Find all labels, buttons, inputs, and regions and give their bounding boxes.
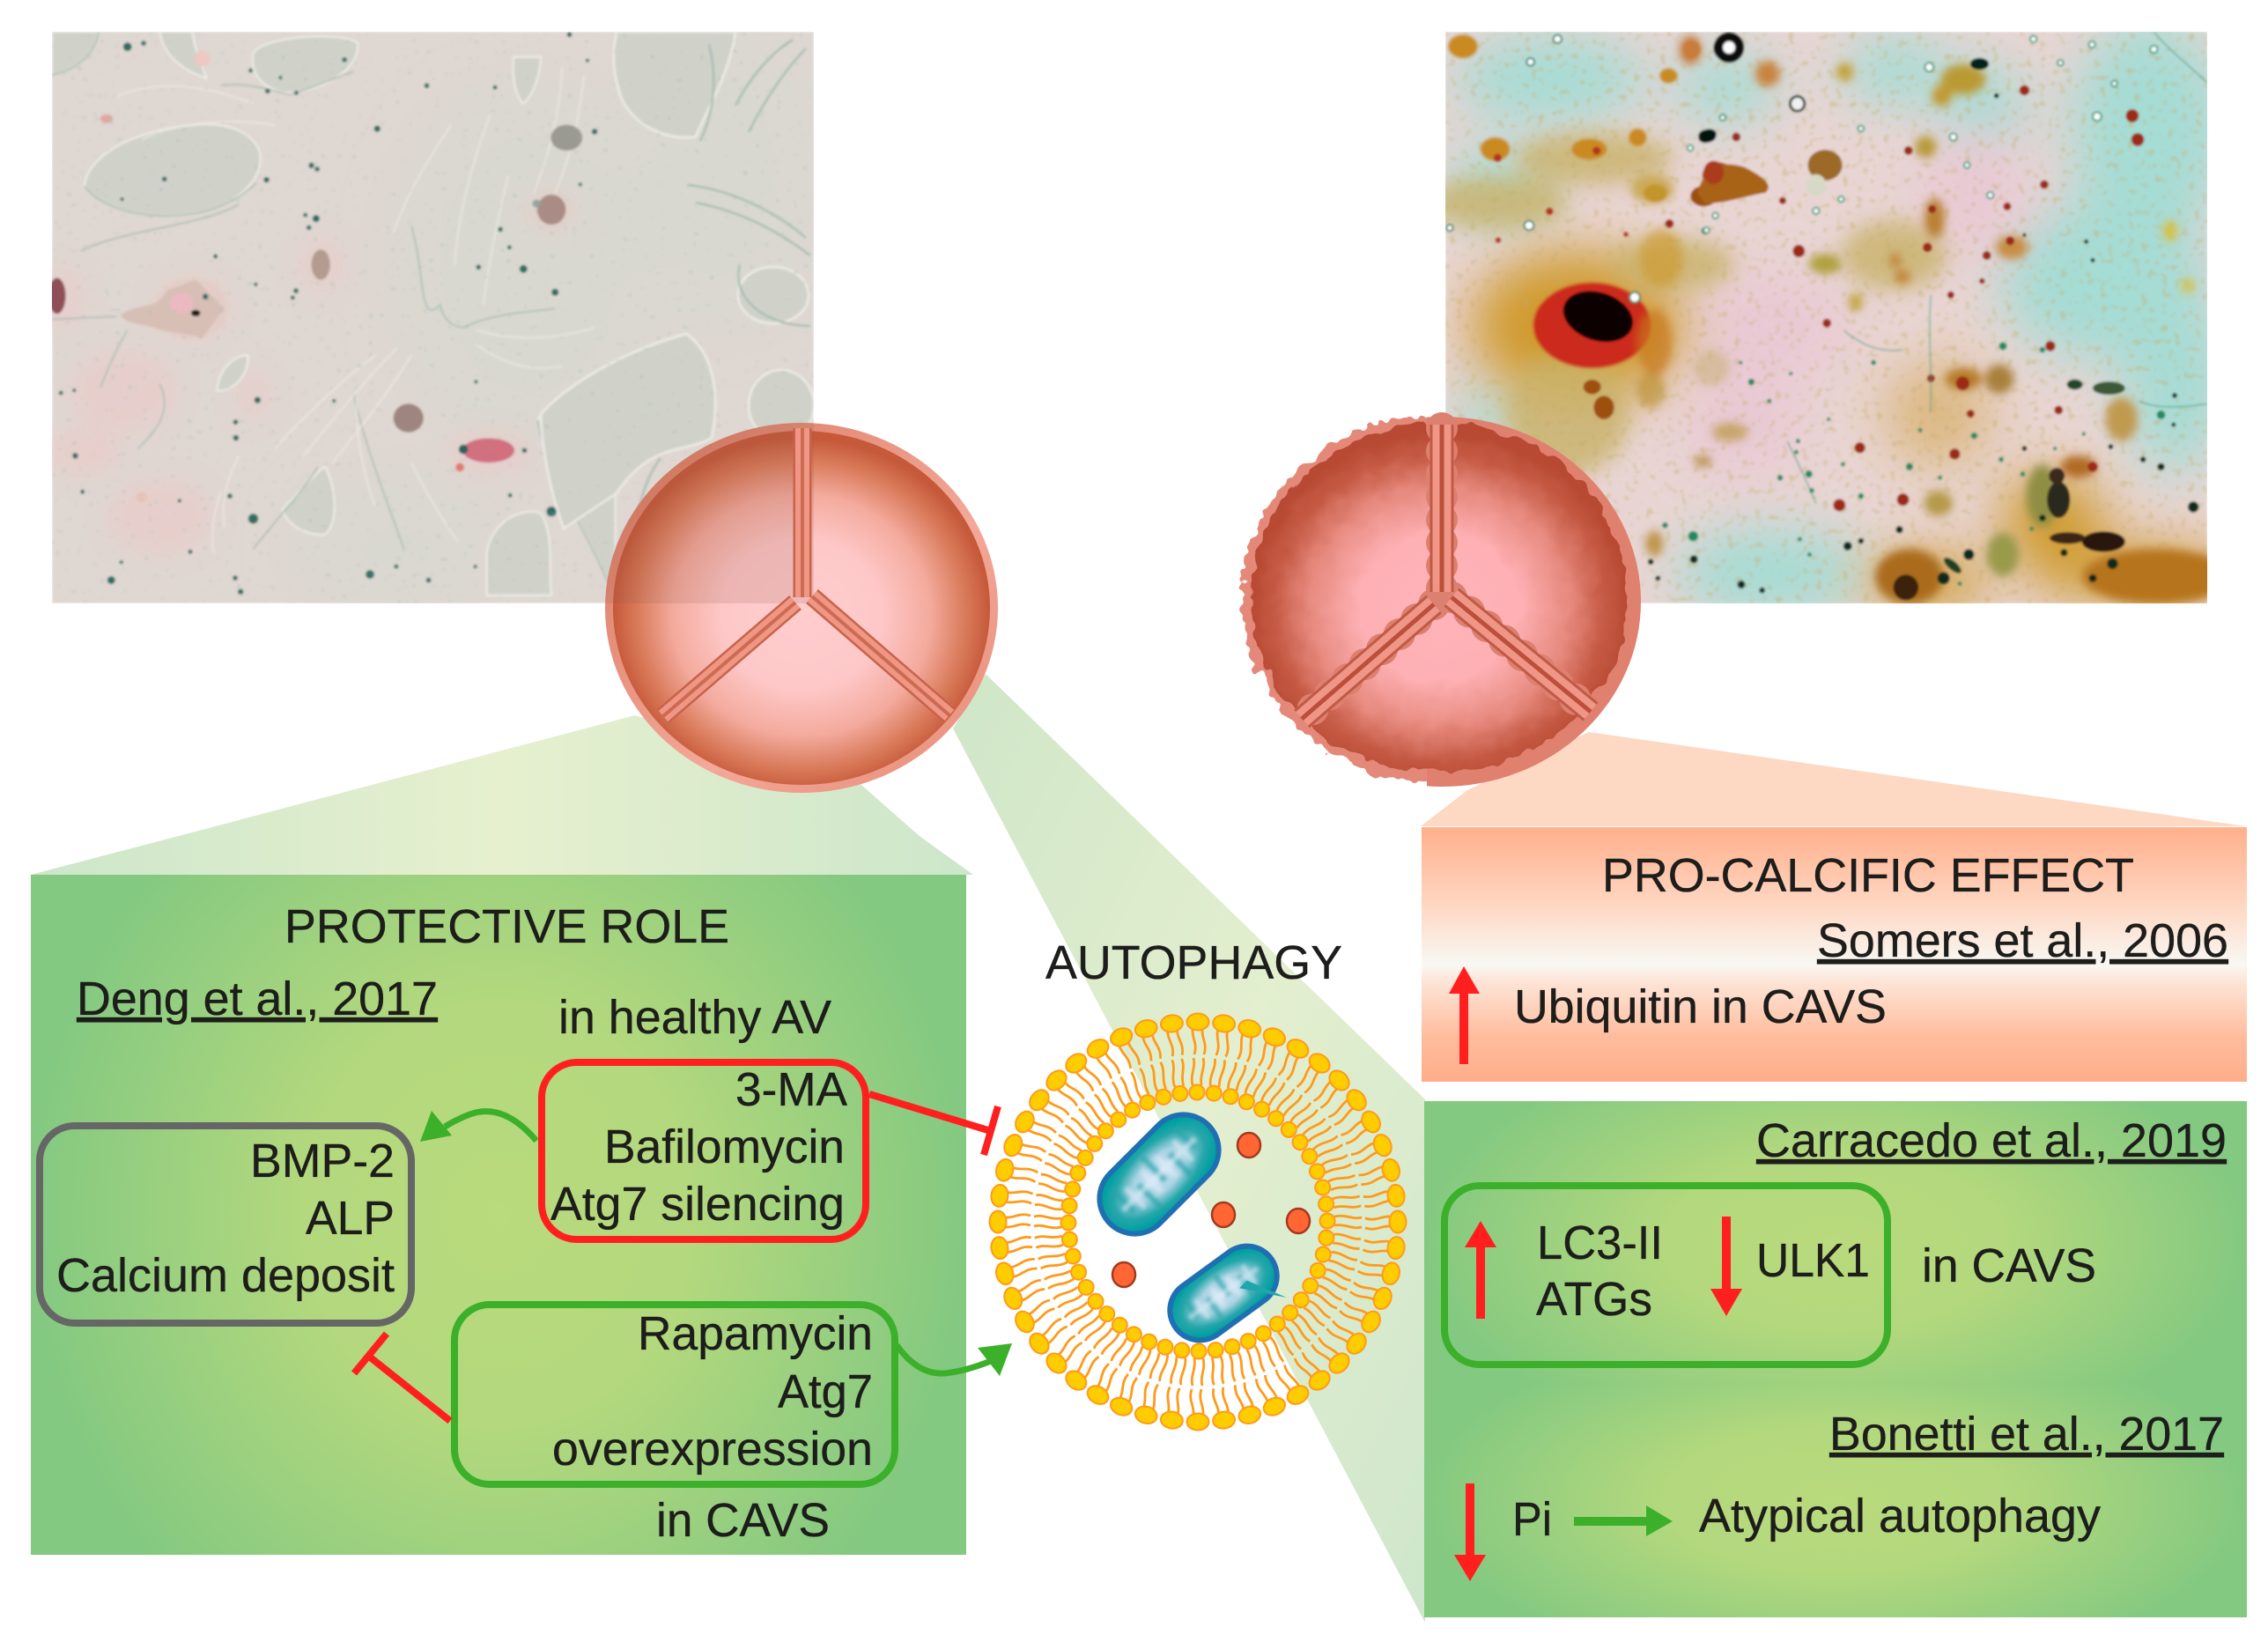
commissures	[1302, 425, 1591, 719]
citation: Deng: Deng et al., 2017	[77, 973, 438, 1025]
box: inhibitors	[542, 1062, 866, 1239]
box: activators	[454, 1305, 895, 1484]
inhibition: activators block markers	[354, 1334, 450, 1421]
arrow: leads to	[1574, 1505, 1673, 1536]
box: activators: overexpression	[552, 1423, 873, 1476]
beam: calcified valve to pro-calcific panel	[1421, 732, 2246, 826]
box: markers	[1444, 1186, 1888, 1365]
text: atypical autophagy: Atypical autophagy	[1699, 1490, 2101, 1542]
cell with dark nucleus	[121, 277, 228, 339]
arrow: down	[1710, 1217, 1742, 1316]
panel: protective role	[31, 875, 966, 1555]
panel: pro-calcific effect	[1422, 827, 2247, 1082]
box: inhibitors: 3-MA	[735, 1063, 847, 1116]
mottled disc	[1251, 423, 1628, 772]
mitochondrion: small	[1155, 1231, 1297, 1362]
calcified aortic valve	[1242, 416, 1641, 787]
arrow: up	[1449, 966, 1480, 1064]
valve rim	[605, 423, 998, 793]
text: Pi: Pi	[1512, 1493, 1552, 1546]
photo: healthy valve cells micrograph	[41, 26, 819, 608]
cargo particles	[1112, 1133, 1310, 1287]
autophagosome membrane	[990, 1013, 1407, 1431]
arrow: down	[1454, 1483, 1486, 1581]
valve disc	[613, 431, 990, 785]
panel: Carracedo study	[1424, 1101, 2247, 1383]
commissures	[663, 428, 949, 716]
box: calcification markers: Calcium deposit	[56, 1249, 395, 1302]
citation: Carracedo: Carracedo et al., 2019	[1756, 1114, 2227, 1167]
beam: healthy valve to right panels	[953, 674, 1425, 1623]
box: activators: Atg7	[778, 1365, 873, 1418]
box: inhibitors: Atg7 silencing	[550, 1178, 845, 1231]
label: in healthy AV: in healthy AV	[558, 991, 831, 1044]
beam: healthy valve to protective panel	[31, 715, 973, 875]
box: calcification markers: ALP	[306, 1192, 395, 1245]
healthy aortic valve	[599, 414, 998, 793]
calcium nodules	[48, 51, 582, 502]
heading: protective role: PROTECTIVE ROLE	[284, 900, 729, 953]
panel: Bonetti study	[1424, 1383, 2247, 1617]
text: LC3-II and ATGs	[1536, 1217, 1663, 1326]
text: LC3-II and ATGs: ATGs	[1536, 1273, 1652, 1326]
arrow: up	[1465, 1221, 1496, 1319]
photo overlap tint	[599, 414, 814, 603]
box: activators: Rapamycin	[638, 1307, 873, 1360]
citation: Bonetti: Bonetti et al., 2017	[1829, 1408, 2224, 1461]
text: ULK1: ULK1	[1756, 1234, 1870, 1287]
box: inhibitors: Bafilomycin	[604, 1121, 845, 1173]
box: calcification markers	[40, 1126, 411, 1323]
autophagy label: AUTOPHAGY	[1045, 936, 1342, 989]
text: LC3-II and ATGs: LC3-II	[1537, 1217, 1663, 1269]
arrow: activators promote autophagy	[897, 1343, 1012, 1376]
photo: calcified valve cells micrograph	[1445, 32, 2207, 603]
arrow: inhibitors promote markers	[420, 1111, 536, 1142]
label: in CAVS: in CAVS	[656, 1494, 830, 1547]
inhibition: red box blocks autophagy	[869, 1094, 998, 1155]
mitochondrion: large	[1082, 1097, 1237, 1252]
rough rim	[1238, 416, 1427, 784]
smooth rim	[1427, 417, 1641, 787]
text: in CAVS: in CAVS	[1922, 1239, 2096, 1292]
text: ubiquitin: Ubiquitin in CAVS	[1514, 980, 1887, 1033]
citation: Somers: Somers et al., 2006	[1817, 914, 2228, 967]
heading: pro-calcific: PRO-CALCIFIC EFFECT	[1602, 849, 2134, 902]
particles	[59, 32, 597, 595]
box: calcification markers: BMP-2	[250, 1135, 395, 1187]
